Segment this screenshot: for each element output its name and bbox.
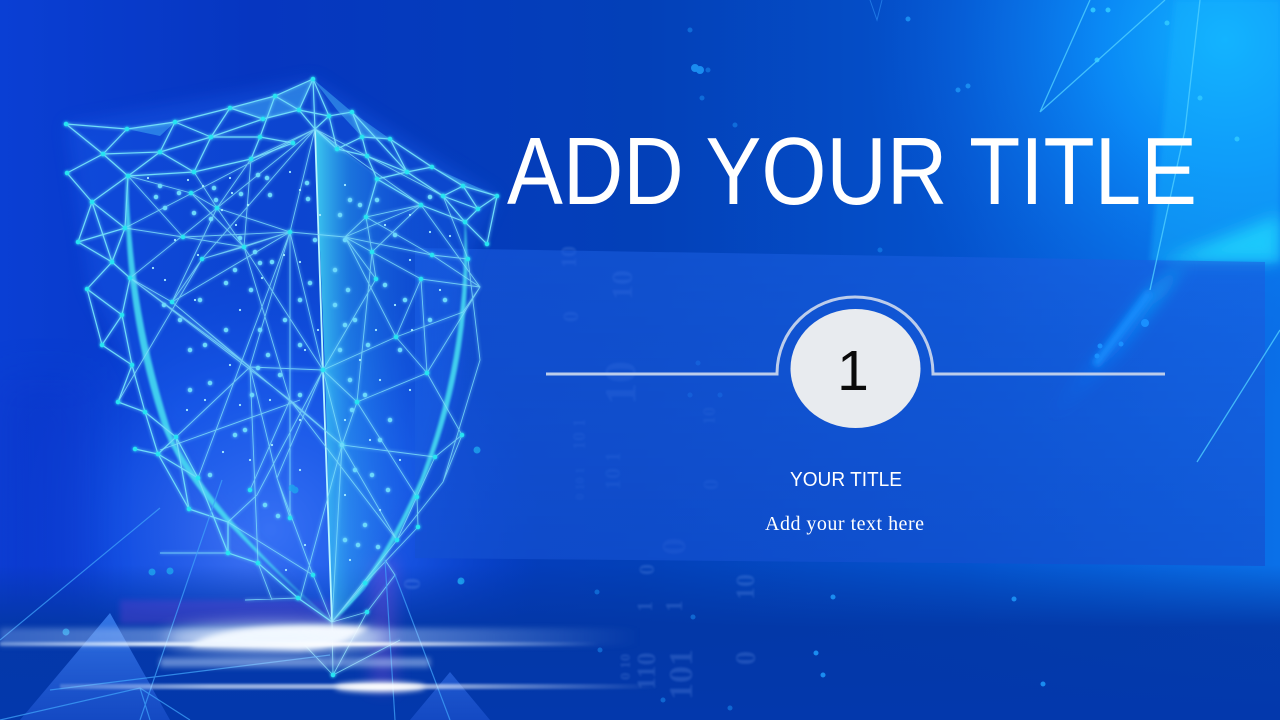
faint binary digits: 10 (731, 574, 760, 600)
outer floating particles (66, 450, 477, 632)
faint binary digits: 1 (662, 600, 688, 612)
faint binary digits: 0 (731, 651, 762, 665)
shield nodes (66, 79, 497, 675)
shield spine (315, 129, 332, 622)
content panel (415, 248, 1265, 566)
faint binary digits: 0 10 (618, 654, 634, 680)
light flares (0, 624, 660, 692)
faint binary digits: 110 (632, 652, 661, 690)
faint binary digits: 10 (699, 407, 719, 425)
background light streak and thin lines, top right (870, 0, 1280, 462)
faint binary digits (400, 246, 762, 700)
shield body glow (66, 79, 497, 622)
faint binary digits: 0 (558, 311, 583, 322)
faint binary digits: 101 (663, 649, 700, 700)
body text: Add your text here (765, 513, 924, 535)
faint binary digits: 10 (596, 361, 645, 405)
floor triangles (0, 480, 490, 720)
shield centre wing (315, 129, 470, 622)
number badge (790, 309, 920, 428)
title: ADD YOUR TITLE (507, 118, 1197, 225)
faint binary digits: 0 (698, 479, 723, 490)
shield (66, 79, 497, 675)
shield mesh, inner (118, 129, 480, 675)
faint binary digits: 1 (632, 601, 657, 612)
faint binary digits: 0 (656, 538, 693, 555)
shield top edge facets (66, 79, 497, 196)
floating particles, right side (460, 10, 1237, 708)
faint binary digits: 10 1 (600, 452, 625, 490)
shield mesh, outer (66, 79, 497, 622)
faint binary digits: 0 (400, 578, 426, 590)
divider with arc (546, 297, 1165, 374)
shield inner sparkle dots (156, 175, 445, 547)
faint binary digits: 10 (606, 270, 639, 300)
shield right ridge (332, 222, 467, 622)
faint binary digits: 0 10 1 (572, 468, 587, 500)
subtitle: YOUR TITLE (790, 469, 902, 491)
faint binary digits: 0 (634, 564, 659, 575)
shield left ridge (126, 176, 332, 622)
number badge: 1 (837, 339, 869, 403)
faint binary digits: 10 1 (569, 418, 589, 450)
faint binary digits: 10 (556, 246, 581, 268)
